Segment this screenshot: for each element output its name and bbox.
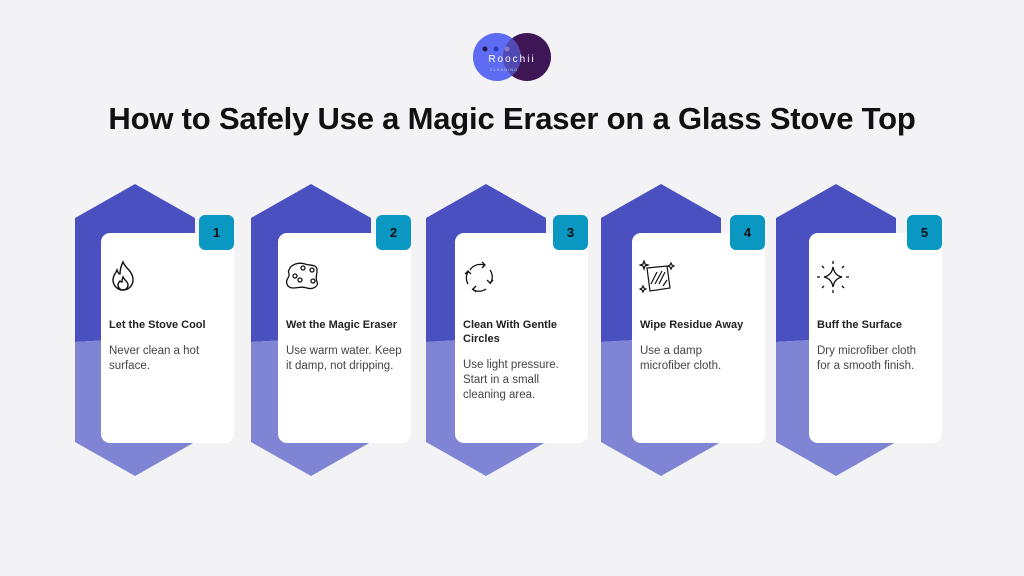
step 2: Use warm water. Keep it damp, not dripping.: [286, 345, 402, 372]
badge 2: [376, 215, 411, 250]
step 5: [809, 233, 942, 443]
step 1: Never clean a hot surface.: [109, 345, 199, 372]
step 1: [101, 233, 234, 443]
logo: CLEANING: [490, 67, 518, 72]
step 5: Buff the Surface: [817, 319, 902, 331]
badge 1: 1: [213, 225, 220, 240]
icon: flame: [112, 260, 134, 291]
step 4: Wipe Residue Away: [640, 319, 743, 331]
badge 4: 4: [744, 225, 751, 240]
badge 3: 3: [567, 225, 574, 240]
step 2: [278, 233, 411, 443]
step 2: Wet the Magic Eraser: [286, 319, 397, 331]
icon: sponge: [286, 262, 318, 290]
logo: Roochii: [488, 54, 536, 65]
step 4: [632, 233, 765, 443]
title: How to Safely Use a Magic Eraser on a Glass Stove Top: [108, 101, 916, 136]
step 3: Clean With Gentle Circles: [463, 319, 557, 345]
step 5: Dry microfiber cloth for a smooth finish.: [817, 345, 916, 372]
badge 4: [730, 215, 765, 250]
logo: [473, 33, 551, 81]
icon: sparkle: [817, 261, 849, 293]
icon: hand wiping: [639, 260, 675, 294]
badge 1: [199, 215, 234, 250]
badge 5: 5: [921, 225, 928, 240]
badge 2: 2: [390, 225, 397, 240]
icon: circular arrows: [464, 262, 494, 292]
step 1: Let the Stove Cool: [109, 319, 206, 331]
step 3: [455, 233, 588, 443]
badge 5: [907, 215, 942, 250]
step 4: Use a damp microfiber cloth.: [640, 345, 721, 372]
badge 3: [553, 215, 588, 250]
step 3: Use light pressure. Start in a small cleaning area.: [463, 359, 559, 401]
